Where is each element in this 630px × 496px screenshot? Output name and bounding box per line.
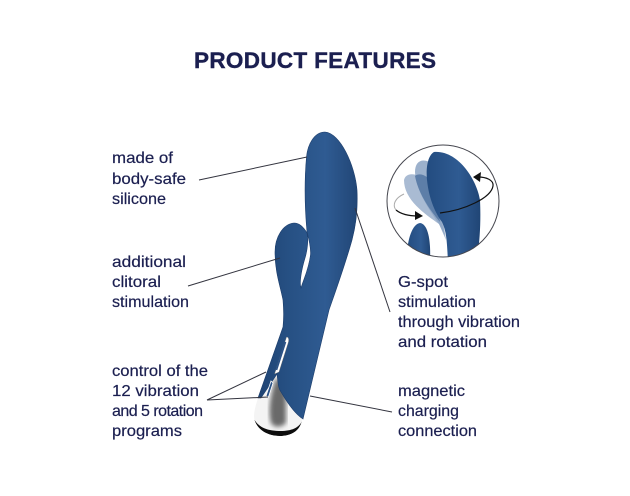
label: control of the programs: control of the (112, 363, 208, 380)
leader lines (188, 157, 392, 412)
control slot (274, 337, 289, 374)
label: G-spot stimulation: through vibration (398, 314, 520, 331)
rotation arrow left (394, 194, 404, 210)
label: G-spot stimulation: stimulation (398, 294, 476, 311)
small arm (408, 223, 430, 255)
label: magnetic charging connection (398, 383, 477, 440)
label: G-spot stimulation (398, 274, 520, 351)
title: PRODUCT FEATURES (194, 48, 436, 73)
main head (427, 152, 480, 262)
label: additional clitoral stimulation: clitoral (112, 274, 161, 291)
label: magnetic charging connection: magnetic (398, 383, 465, 400)
label: made of body-safe silicone (112, 150, 186, 208)
infographic canvas (112, 52, 520, 440)
circle outline (387, 145, 499, 257)
label: made of body-safe silicone: silicone (112, 191, 166, 208)
label: G-spot stimulation: G-spot (398, 274, 449, 291)
label: G-spot stimulation: and rotation (398, 334, 487, 351)
rotation arrow right (440, 177, 493, 213)
label: additional clitoral stimulation (112, 254, 189, 311)
label: made of body-safe silicone: made of (112, 150, 174, 167)
blue body (258, 132, 357, 419)
label: magnetic charging connection: charging (398, 403, 459, 420)
rotation detail circle (387, 145, 499, 262)
small button (266, 381, 273, 397)
label: additional clitoral stimulation: additional (112, 254, 186, 271)
label: additional clitoral stimulation: stimulation (112, 294, 189, 311)
label: control of the programs: 12 vibration (112, 383, 199, 400)
label: made of body-safe silicone: body-safe (112, 171, 186, 188)
label: control of the programs (112, 363, 208, 440)
label: control of the programs: and 5 rotation (112, 403, 203, 420)
product illustration (250, 132, 357, 440)
label: magnetic charging connection: connection (398, 423, 477, 440)
label: control of the programs: programs (112, 423, 182, 440)
chrome charging tip (254, 375, 302, 436)
ghost rotation positions (404, 174, 445, 235)
